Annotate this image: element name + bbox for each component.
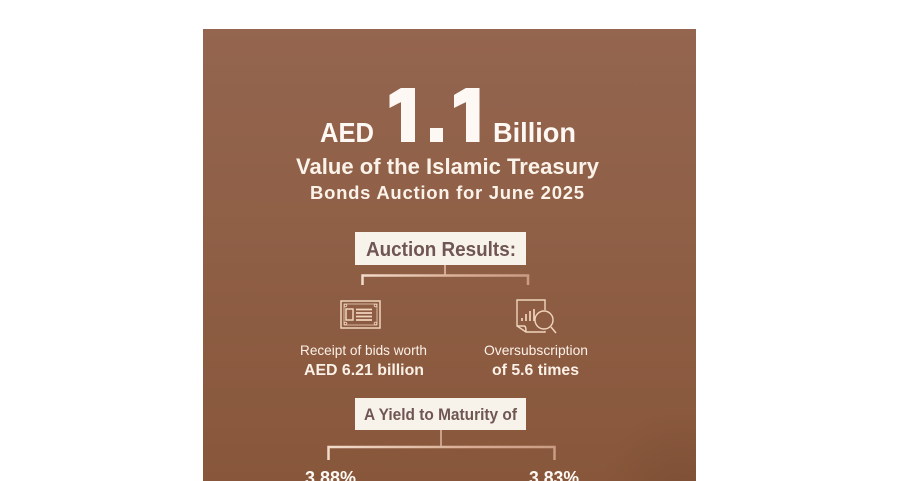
label box: Auction Results — [355, 232, 526, 265]
infographic canvas — [203, 29, 696, 481]
stat: oversubscription: of 5.6 times — [492, 362, 579, 379]
subtitle: Value of the Islamic Treasury — [296, 154, 600, 179]
stat: oversubscription — [484, 342, 588, 379]
subtitle — [296, 154, 600, 203]
stat: bids received: AED 6.21 billion — [304, 362, 424, 379]
headline: AED 1.1 Billion: Billion — [493, 117, 576, 148]
headline: AED 1.1 Billion: . — [426, 71, 447, 159]
subtitle: Bonds Auction for June 2025 — [310, 182, 584, 203]
label box: A Yield to Maturity of — [355, 398, 526, 430]
label box: Auction Results: Auction Results: — [366, 239, 516, 261]
headline: AED 1.1 Billion: 1 — [381, 71, 424, 159]
stat: bids received — [300, 342, 427, 379]
stat: oversubscription: Oversubscription — [484, 342, 588, 358]
headline: AED 1.1 Billion: AED — [320, 117, 374, 148]
headline: AED 1.1 Billion — [320, 88, 574, 142]
headline: AED 1.1 Billion: 1 — [446, 71, 489, 159]
connector: yield branches — [328, 430, 554, 460]
content layer — [296, 71, 600, 481]
stat: bids received: Receipt of bids worth — [300, 342, 427, 358]
icon: report with magnifier — [517, 300, 556, 333]
connector: auction results branches — [362, 265, 528, 285]
icon: bond certificate — [341, 301, 380, 328]
panel: brown background — [203, 29, 696, 481]
label box: A Yield to Maturity of: A Yield to Maturity of — [364, 405, 517, 424]
